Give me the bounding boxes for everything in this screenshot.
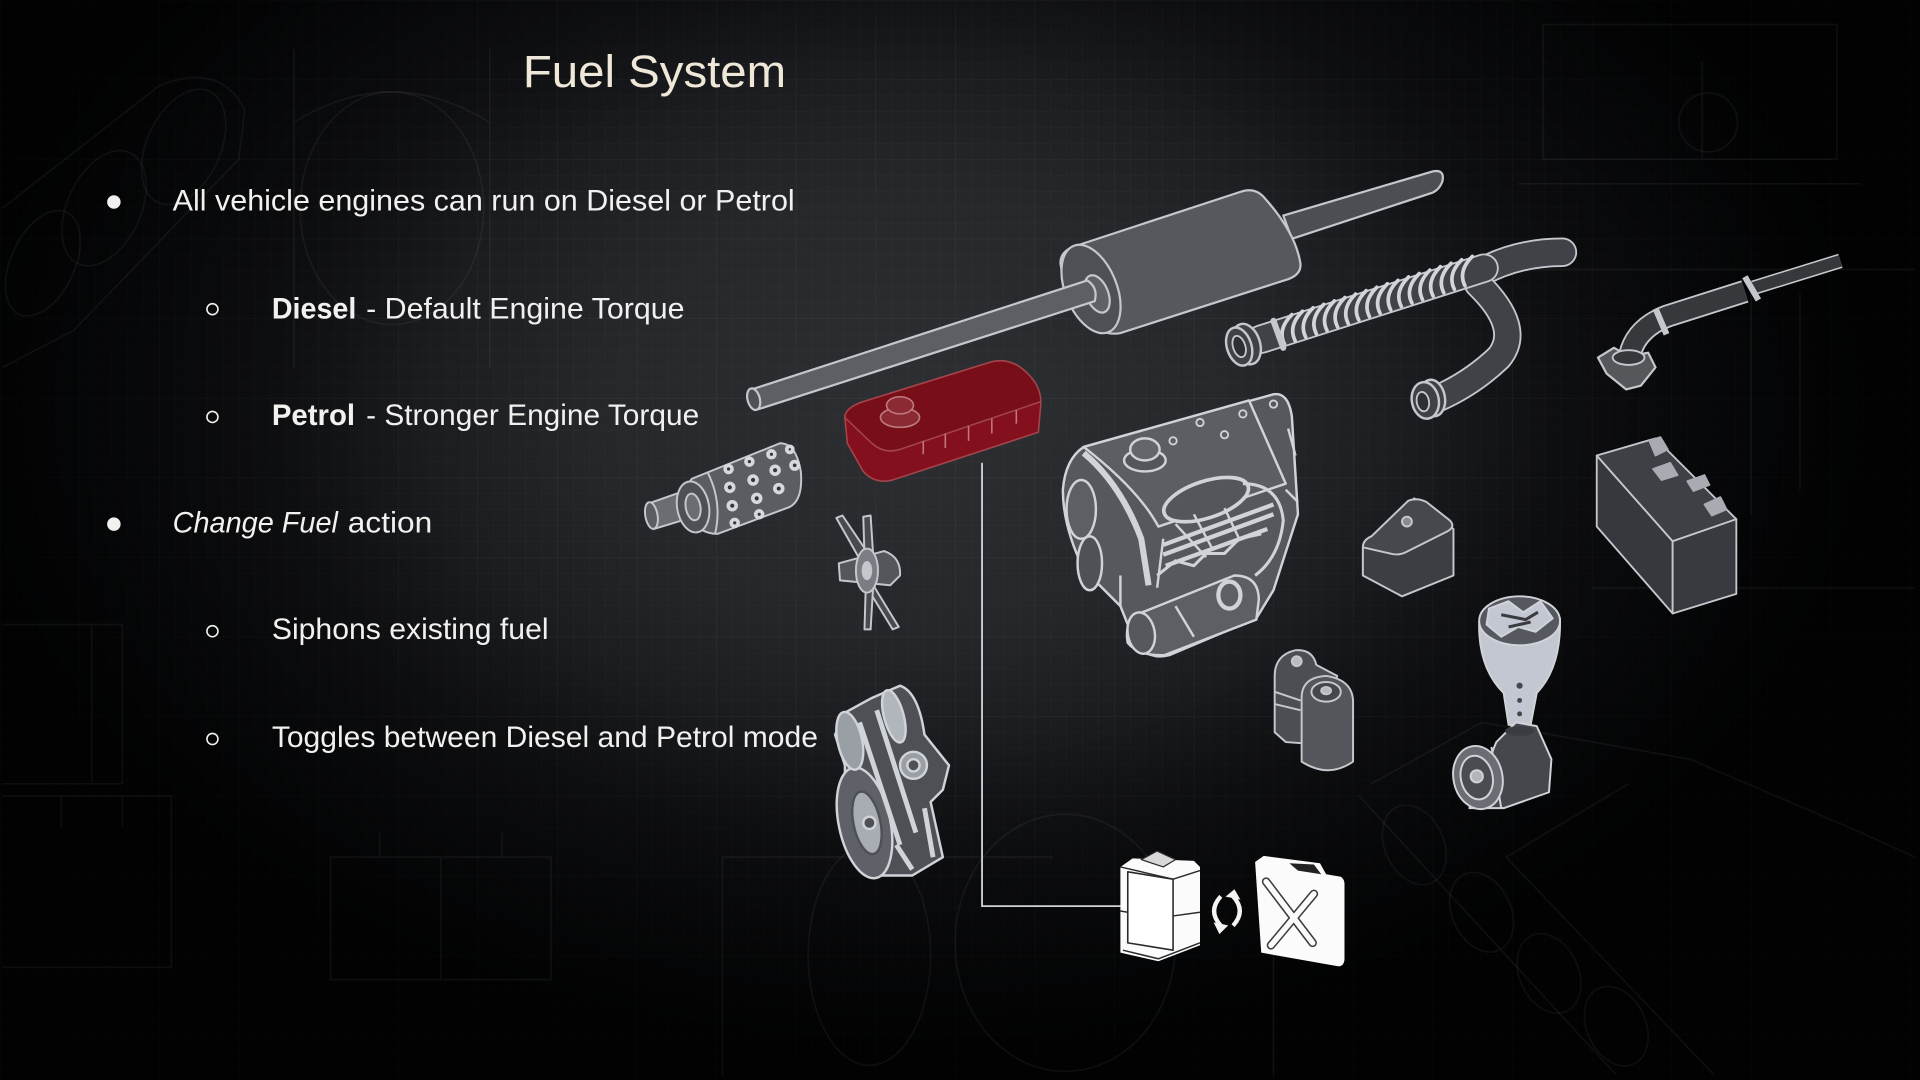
bullet list	[107, 185, 818, 754]
sub-bullet: diesel: Diesel	[272, 292, 356, 325]
connector line	[982, 463, 1122, 906]
red fuel tank highlighted	[845, 361, 1041, 481]
twin cylinders	[1275, 650, 1353, 770]
icon: metal fuel can	[1120, 851, 1200, 961]
sub-bullet: diesel: - Default Engine Torque	[366, 292, 684, 325]
sub-bullet: siphons: Siphons existing fuel	[272, 613, 549, 646]
sub-bullet: petrol	[207, 399, 699, 432]
engine block	[1063, 394, 1298, 656]
bullet: change fuel: Change Fuel	[173, 507, 339, 540]
thin hose with flange	[1598, 261, 1840, 389]
bullet: change fuel: action	[348, 507, 432, 540]
perforated cylinder	[643, 443, 801, 535]
sub-bullet: petrol: - Stronger Engine Torque	[366, 399, 699, 432]
corrugated hose	[1221, 252, 1562, 421]
bullet: change fuel	[107, 507, 432, 540]
icon: jerry can with X	[1255, 856, 1344, 966]
muffler and exhaust pipe	[745, 171, 1443, 411]
icon: swap arrows	[1214, 890, 1240, 933]
title: Fuel System	[523, 46, 786, 97]
battery	[1597, 437, 1736, 613]
cube block	[1363, 498, 1453, 596]
bullet: all engines: All vehicle engines can run on Diesel or Petrol	[173, 185, 795, 218]
sub-bullet: toggles: Toggles between Diesel and Petrol mode	[272, 721, 818, 754]
pulley belt assembly	[828, 686, 949, 883]
sub-bullet: petrol: Petrol	[272, 399, 355, 432]
distributor vase part	[1447, 596, 1560, 814]
fan	[836, 516, 900, 629]
sub-bullet: diesel	[207, 292, 684, 325]
